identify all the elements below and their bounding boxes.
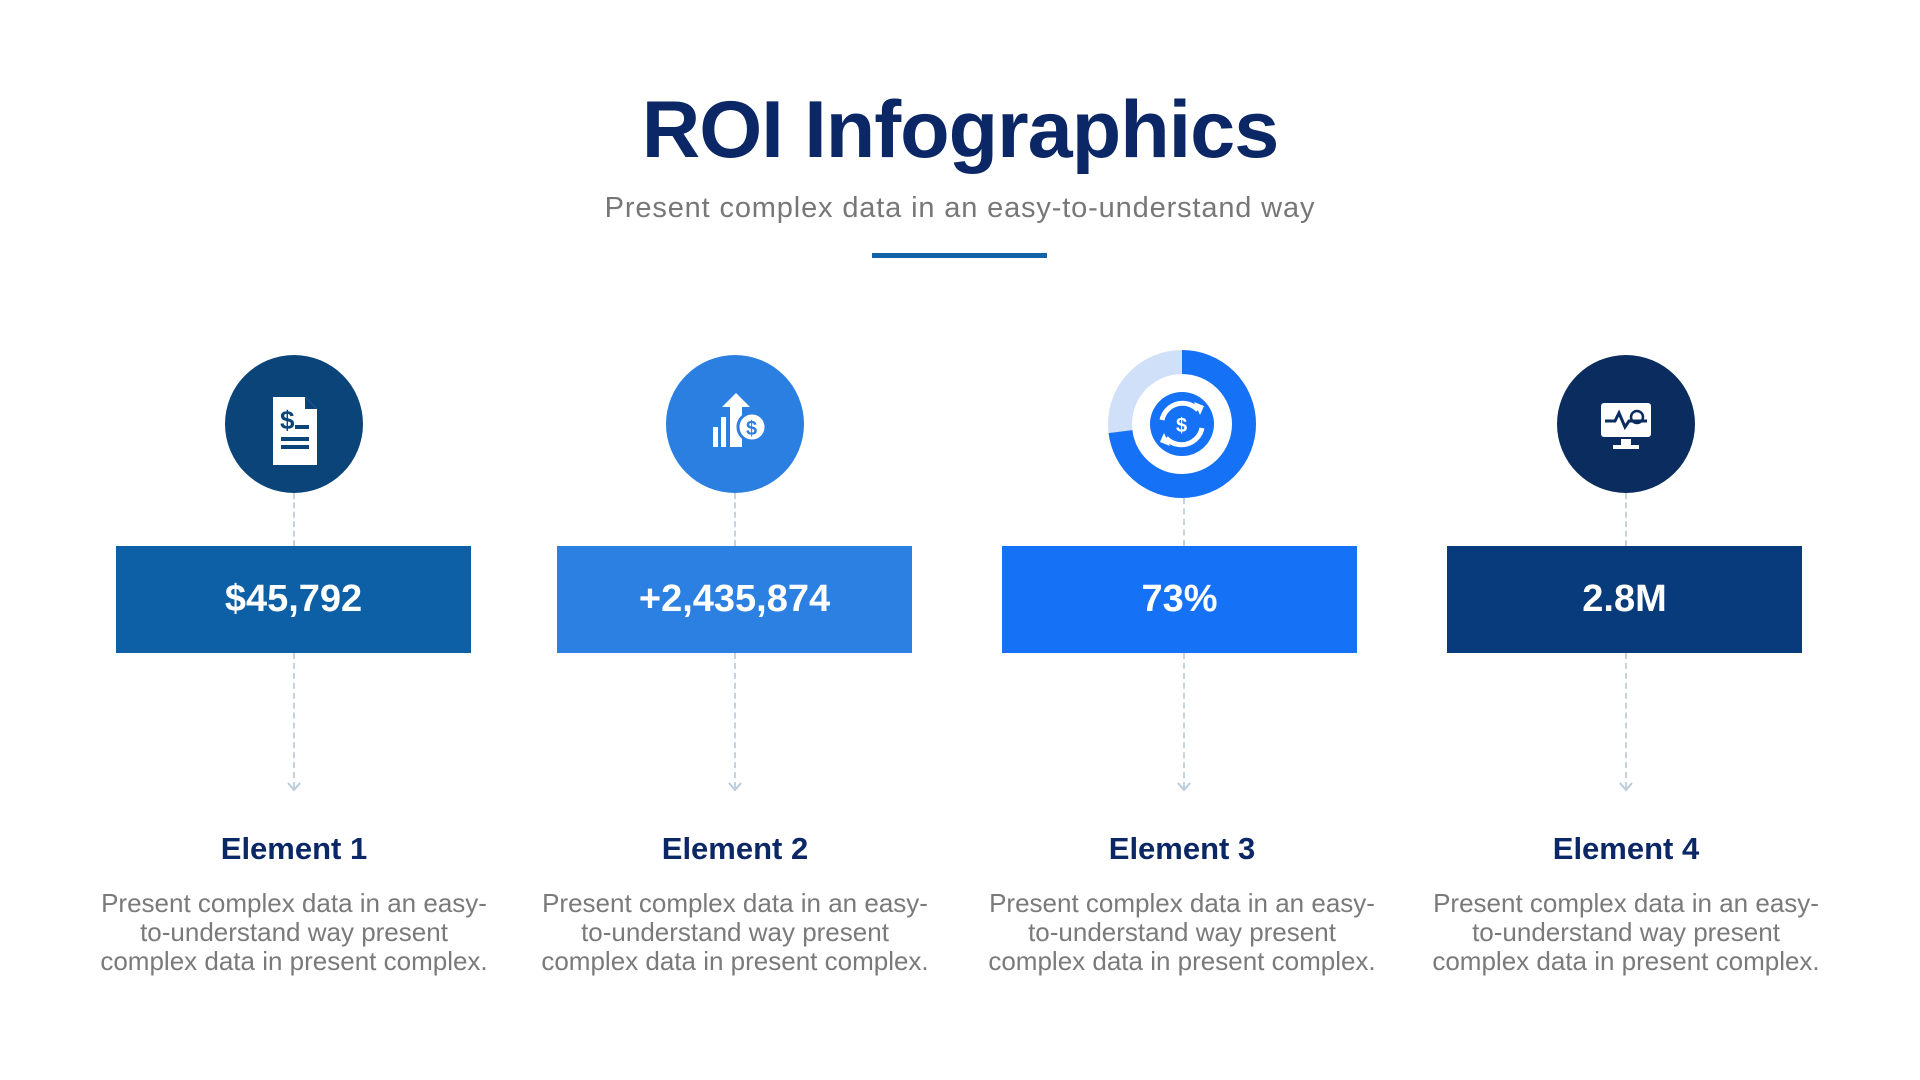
column 2 xyxy=(541,355,929,976)
title underline xyxy=(872,253,1047,258)
arrow xyxy=(287,782,301,792)
arrow xyxy=(728,782,742,792)
value box xyxy=(1002,546,1357,653)
column 3 xyxy=(988,350,1376,976)
subtitle: Present complex data in an easy-to-understand way xyxy=(605,192,1315,224)
value box xyxy=(1447,546,1802,653)
heading: Element 3 xyxy=(1109,831,1255,866)
icon: monitor xyxy=(1557,355,1695,493)
icon: growth: $ xyxy=(746,418,757,440)
description: complex data in present complex. xyxy=(988,946,1376,976)
description: to-understand way present xyxy=(1028,917,1336,947)
heading: Element 4 xyxy=(1553,831,1699,866)
description: complex data in present complex. xyxy=(1432,946,1820,976)
description: complex data in present complex. xyxy=(541,946,929,976)
icon: invoice xyxy=(225,355,363,493)
title: ROI Infographics xyxy=(642,85,1278,175)
description xyxy=(988,888,1376,976)
value box: $45,792 xyxy=(225,578,362,620)
description xyxy=(100,888,488,976)
description: to-understand way present xyxy=(140,917,448,947)
icon: invoice: $ xyxy=(280,405,295,435)
icon: donut 73%: $ xyxy=(1176,415,1187,437)
value box xyxy=(116,546,471,653)
description: to-understand way present xyxy=(581,917,889,947)
description: complex data in present complex. xyxy=(100,946,488,976)
arrow xyxy=(1619,782,1633,792)
icon: donut 73% xyxy=(1108,350,1256,498)
icon: growth xyxy=(666,355,804,493)
heading: Element 2 xyxy=(662,831,808,866)
value box: 73% xyxy=(1141,578,1218,620)
value box: +2,435,874 xyxy=(639,578,830,620)
description: Present complex data in an easy- xyxy=(989,888,1375,918)
column 1 xyxy=(100,355,488,976)
value box xyxy=(557,546,912,653)
column 4 xyxy=(1432,355,1820,976)
arrow xyxy=(1177,782,1191,792)
description: Present complex data in an easy- xyxy=(101,888,487,918)
heading: Element 1 xyxy=(221,831,367,866)
description: Present complex data in an easy- xyxy=(1433,888,1819,918)
description: Present complex data in an easy- xyxy=(542,888,928,918)
description xyxy=(541,888,929,976)
value box: 2.8M xyxy=(1582,578,1667,620)
description: to-understand way present xyxy=(1472,917,1780,947)
description xyxy=(1432,888,1820,976)
